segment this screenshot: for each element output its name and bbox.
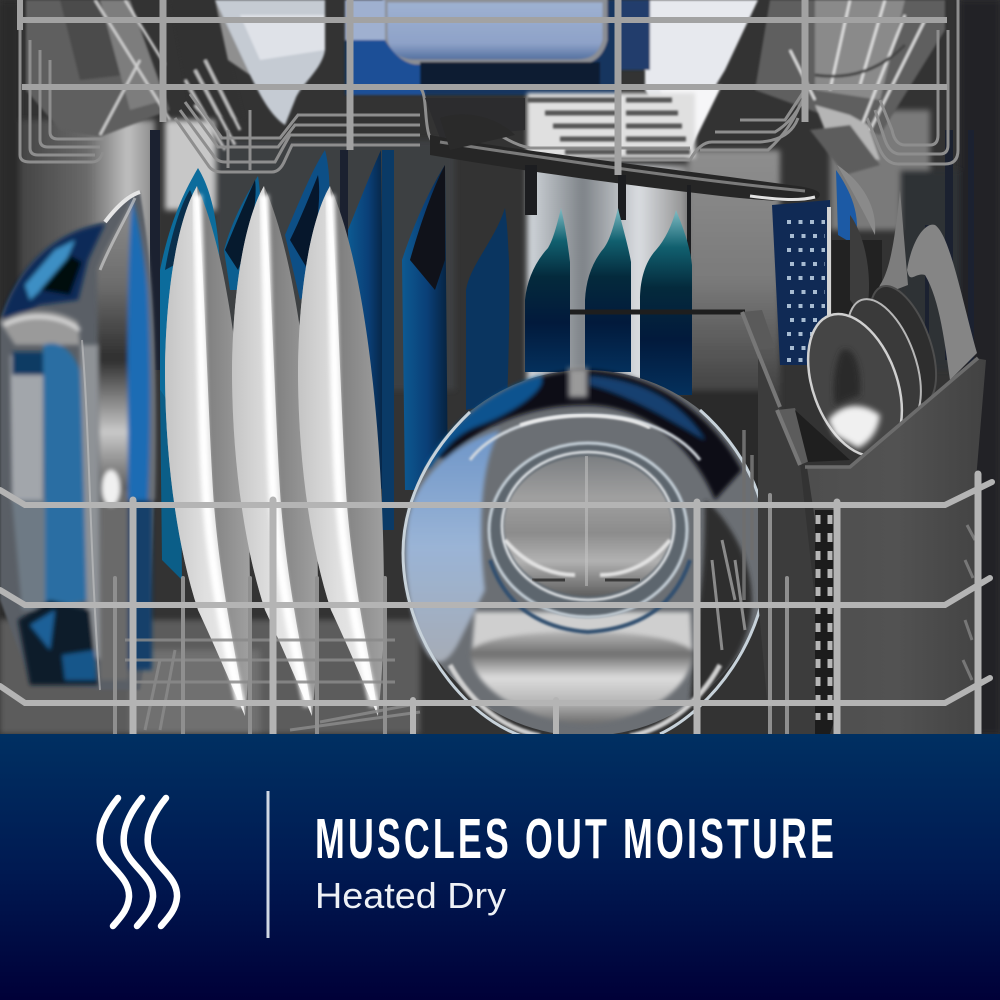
lower rack: tines behind basket [744, 430, 752, 600]
plate 3 [298, 186, 384, 716]
bowl: upper dark shell [432, 370, 742, 500]
dish: blue rim [128, 198, 152, 500]
plate 2 [232, 186, 318, 716]
subheading: Heated Dry [315, 875, 506, 916]
upper rack: left glass [26, 0, 245, 150]
bowl: inner ring [488, 442, 688, 618]
icon: heat waves [100, 798, 177, 926]
upper rack: bright gaps behind wires [527, 93, 695, 158]
blue plates: rear right [466, 208, 692, 410]
lower rack spray arm [430, 114, 820, 201]
rear floor rail [570, 310, 745, 314]
utensil basket: utensils and bowls [790, 190, 977, 469]
upper rack: right glass [755, 0, 945, 175]
bowl: blue top-left [425, 376, 542, 470]
hub shadow under container [425, 98, 525, 138]
lower rack: main wires [0, 474, 992, 734]
utensil basket: grater [772, 165, 875, 365]
plate 1 [165, 186, 250, 716]
grater holes [787, 222, 825, 360]
large glass bowl [403, 368, 769, 740]
bowl: lower chamber [472, 612, 692, 688]
divider [266, 791, 270, 938]
upper rack: white cone dish [620, 0, 758, 150]
tub corner rails [150, 130, 974, 610]
dish: top blue shoulder [2, 224, 105, 320]
upper rack: blue container [345, 0, 620, 95]
bowl: middle arcs [470, 415, 700, 460]
lower rack: short tines [115, 495, 787, 734]
bowl: outer rim [403, 410, 768, 740]
upper rack: horizontal slats in centre [527, 100, 690, 152]
tub back wall [0, 0, 1000, 734]
utensil basket body [742, 310, 986, 734]
blue plates: rear left [160, 150, 448, 580]
photo: dishwasher interior [0, 0, 1000, 740]
bowl: light blue crescent [406, 430, 500, 662]
lower rack: back floor wires [125, 640, 420, 730]
upper rack: main wires [20, 0, 947, 175]
bowl: right dark wall [690, 500, 752, 700]
bottom banner [0, 734, 1000, 1000]
tall wall rails [525, 165, 691, 395]
dish: side columns [10, 355, 43, 500]
glass baking dish, left [0, 192, 156, 690]
upper rack: white bowl [215, 0, 325, 125]
upper rack: wire basket floor [20, 0, 958, 172]
dish: silver panel [97, 200, 132, 490]
white plates [165, 186, 384, 716]
